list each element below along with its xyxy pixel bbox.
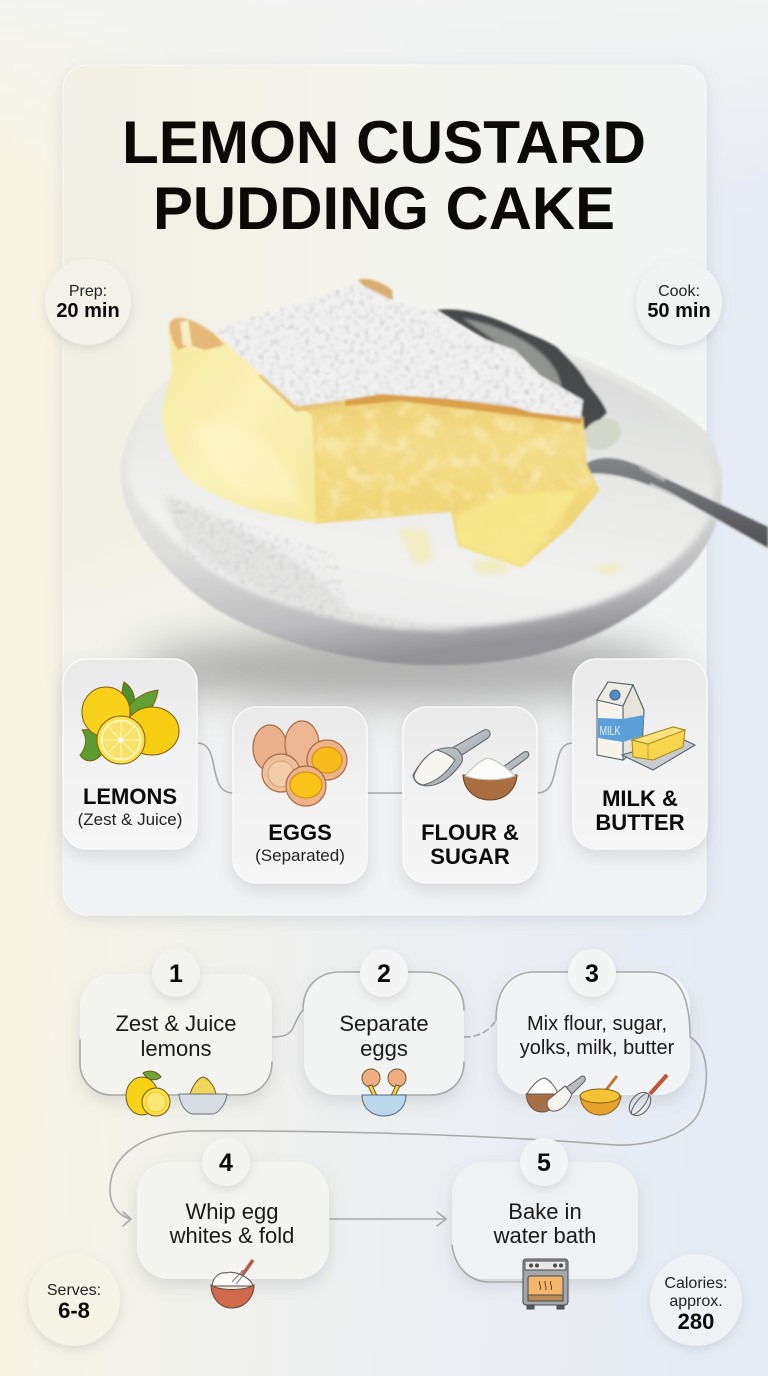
ingredient card: eggs <box>233 707 367 883</box>
step 1 <box>80 949 272 1116</box>
badge 2: 2 <box>377 960 391 988</box>
cake front face <box>294 392 600 568</box>
ingredient card: milk and butter <box>573 659 707 849</box>
icon: milk carton and butter <box>597 682 695 770</box>
plate <box>120 350 722 665</box>
stat: serves <box>28 1254 120 1346</box>
text step 5: Bake in <box>508 1199 582 1224</box>
cake left face <box>162 318 316 524</box>
badge 3 <box>568 949 616 997</box>
text step 2: Separate <box>339 1011 429 1036</box>
icon: flour scoop and sugar bowl <box>413 730 529 800</box>
title <box>122 109 646 242</box>
stat: prep time <box>45 259 131 345</box>
text step 3 <box>520 1013 675 1059</box>
crumb texture <box>316 400 596 564</box>
label: milk and butter: BUTTER <box>595 810 685 835</box>
icon: lemon and juicer <box>126 1071 227 1116</box>
icon: eggs <box>253 721 347 806</box>
badge 1: 1 <box>169 960 183 988</box>
ingredient card: lemons <box>63 659 197 849</box>
text step 3: yolks, milk, butter <box>520 1037 675 1059</box>
powdered sugar on plate <box>165 495 470 632</box>
text step 3: Mix flour, sugar, <box>527 1013 667 1035</box>
title: PUDDING CAKE <box>153 175 615 242</box>
label: eggs <box>255 820 345 865</box>
label: lemons: LEMONS <box>83 784 177 809</box>
stat: calories: approx. <box>669 1293 723 1310</box>
text step 2 <box>339 1011 429 1061</box>
badge 2 <box>360 949 408 997</box>
stat: calories <box>650 1254 742 1346</box>
badge 4 <box>202 1138 250 1186</box>
text step 1: Zest & Juice <box>115 1011 237 1036</box>
spoon <box>437 309 768 549</box>
text step 5 <box>493 1199 596 1248</box>
badge 5 <box>520 1138 568 1186</box>
ingredient connectors <box>197 743 573 793</box>
step 3 <box>496 949 690 1120</box>
stat: calories: 280 <box>678 1309 714 1334</box>
badge 3: 3 <box>585 960 599 988</box>
plate shadow <box>135 632 675 704</box>
label: lemons: (Zest & Juice) <box>78 810 182 829</box>
text step 5: water bath <box>493 1223 596 1248</box>
text step 2: eggs <box>360 1036 408 1061</box>
plate well with milky sauce <box>128 358 714 628</box>
label: flour and sugar: FLOUR & <box>421 820 519 845</box>
crumbs on plate <box>398 528 625 576</box>
stat: cook time <box>636 259 722 345</box>
label: lemons <box>78 784 182 829</box>
panel: main card <box>63 65 706 915</box>
badge 1 <box>152 949 200 997</box>
label: milk and butter: MILK & <box>602 786 678 811</box>
label: flour and sugar: SUGAR <box>430 844 510 869</box>
step 4 <box>137 1138 329 1308</box>
badge 5: 5 <box>537 1149 551 1177</box>
icon: bowls and whisk <box>526 1075 667 1120</box>
label: flour and sugar <box>421 820 519 869</box>
icon: milk carton and butter: MILK <box>600 723 621 738</box>
step 5 <box>452 1138 638 1309</box>
icon: whipped whites in a bowl <box>211 1260 254 1308</box>
label: eggs: (Separated) <box>255 846 345 865</box>
crust <box>169 318 225 350</box>
label: eggs: EGGS <box>268 820 332 845</box>
powder texture <box>213 283 583 418</box>
icon: separating eggs over a bowl <box>362 1069 406 1116</box>
step 2 <box>303 949 464 1116</box>
text step 1: lemons <box>141 1036 211 1061</box>
title: LEMON CUSTARD <box>122 109 646 176</box>
text step 1 <box>115 1011 237 1061</box>
powdered sugar top <box>213 283 583 418</box>
text step 4: Whip egg <box>186 1199 278 1224</box>
ingredient card: flour and sugar <box>403 707 537 883</box>
icon: oven <box>523 1259 568 1309</box>
text step 4 <box>169 1199 294 1248</box>
icon: lemons <box>80 682 179 764</box>
photo: lemon custard pudding cake on a plate <box>120 279 768 665</box>
stat: cook time: 50 min <box>647 300 711 322</box>
stat: cook time: Cook: <box>658 283 700 300</box>
step flow connectors <box>110 1010 706 1226</box>
label: milk and butter <box>595 786 685 835</box>
stat: serves: Serves: <box>47 1282 101 1299</box>
stat: serves: 6-8 <box>58 1298 90 1323</box>
stat: prep time: 20 min <box>56 300 120 322</box>
stat: calories: Calories: <box>664 1275 728 1292</box>
badge 4: 4 <box>219 1149 233 1177</box>
text step 4: whites & fold <box>169 1223 294 1248</box>
stat: prep time: Prep: <box>69 283 107 300</box>
